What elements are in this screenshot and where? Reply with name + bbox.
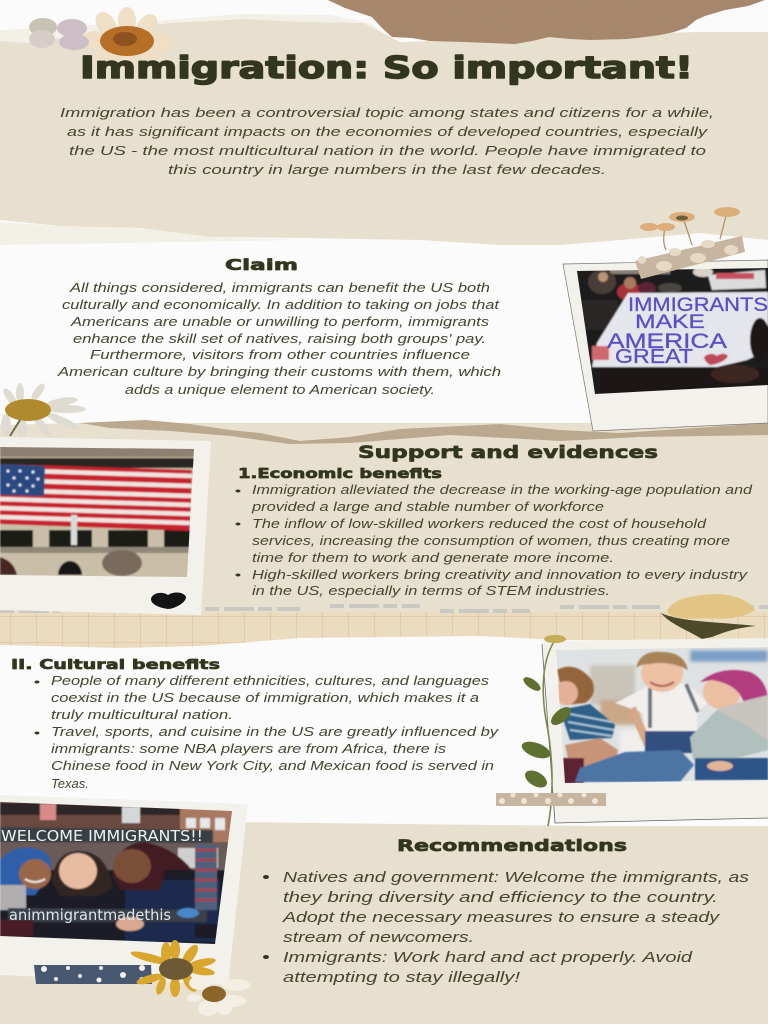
claim text: culturally and economically. In addition to taking on jobs that: [62, 297, 501, 312]
economic benefits heading: 1.Economic benefits: [238, 466, 442, 482]
cultural benefits bullets: Travel, sports, and cuisine in the US are greatly influenced by: [51, 724, 500, 739]
claim text: American culture by bringing their customs with them, which: [57, 364, 501, 379]
protest photo: [577, 268, 768, 394]
cultural benefits bullets: immigrants: some NBA players are from Africa, there is: [51, 741, 447, 756]
economic benefits bullets: High-skilled workers bring creativity and innovation to every industry: [252, 567, 749, 582]
recommendations bullets: attempting to stay illegally!: [283, 969, 521, 986]
cultural benefits bullets: Texas.: [51, 776, 89, 791]
recommendations bullets: [263, 869, 750, 986]
polaroid: protest sign photo: [563, 260, 768, 431]
claim text: Furthermore, visitors from other countries influence: [90, 347, 470, 362]
economic benefits bullets: [236, 482, 753, 598]
recommendations heading: Recommendations: [397, 836, 627, 855]
claim text: enhance the skill set of natives, raising both groups' pay.: [73, 331, 486, 346]
icon: dried yellow flower: [661, 594, 756, 639]
claim heading: Claim: [225, 256, 298, 274]
economic benefits bullets: The inflow of low-skilled workers reduced the cost of household: [252, 516, 707, 531]
icon: green stem with leaves: [520, 635, 574, 826]
economic benefits bullets: Immigration alleviated the decrease in the working-age population and: [252, 482, 753, 497]
polaroid: children photo: [542, 638, 768, 823]
torn brown paper: [328, 0, 765, 44]
economic benefits bullets: in the US, especially in terms of STEM industries.: [252, 583, 610, 598]
flag photo: [0, 445, 200, 580]
panel: support and evidences: [236, 443, 753, 598]
intro text: the US - the most multicultural nation in the world. People have immigrated to: [69, 143, 706, 158]
washi tape: navy hearts: [34, 965, 152, 984]
recommendations bullets: Natives and government: Welcome the immigrants, as: [283, 869, 750, 886]
photo hashtag text: animmigrantmadethis: [9, 906, 171, 924]
recommendations bullets: Immigrants: Work hard and act properly. Avoid: [283, 949, 693, 966]
economic benefits bullets: services, increasing the consumption of women, thus creating more: [252, 533, 730, 548]
support heading: Support and evidences: [358, 443, 658, 463]
economic benefits bullets: provided a large and stable number of workforce: [251, 499, 604, 514]
recommendations bullets: they bring diversity and efficiency to the country.: [283, 889, 718, 906]
claim text: All things considered, immigrants can benefit the US both: [69, 280, 490, 295]
recommendations bullets: Adopt the necessary measures to ensure a steady: [282, 909, 721, 926]
photo sign text: WELCOME IMMIGRANTS!!: [1, 827, 203, 845]
intro text: [60, 105, 714, 177]
washi tape: hearts, top: [635, 236, 745, 279]
cultural benefits bullets: [34, 673, 500, 791]
welcome photo: [0, 800, 235, 948]
intro text: this country in large numbers in the last few decades.: [168, 162, 606, 177]
sign lettering: AMERICA: [607, 330, 727, 353]
sign lettering: IMMIGRANTS: [628, 295, 768, 316]
polaroid: flag building photo: [0, 437, 211, 615]
intro text: Immigration has been a controversial topic among states and citizens for a while,: [60, 105, 714, 120]
pressed flowers, top left: [29, 7, 174, 73]
claim text: [57, 280, 501, 397]
cultural benefits bullets: coexist in the US because of immigration, which makes it a: [51, 690, 479, 705]
sign lettering: [607, 295, 768, 368]
cultural benefits heading: II. Cultural benefits: [11, 657, 220, 673]
economic benefits bullets: time for them to work and generate more income.: [252, 550, 614, 565]
cultural benefits bullets: Chinese food in New York City, and Mexican food is served in: [51, 758, 494, 773]
intro text: as it has significant impacts on the economies of developed countries, especially: [67, 124, 709, 139]
claim text: Americans are unable or unwilling to perform, immigrants: [70, 314, 490, 329]
panel: recommendations: [263, 836, 750, 986]
icon: small orange flowers: [640, 207, 740, 250]
icon: sunflower: [82, 7, 174, 73]
sign lettering: GREAT: [615, 346, 693, 368]
washi tape: hearts, middle: [496, 792, 606, 806]
icon: small white flower: [187, 976, 250, 1016]
recommendations bullets: stream of newcomers.: [283, 929, 474, 946]
icon: white daisy: [1, 382, 86, 441]
polaroid: welcome immigrants photo: [0, 795, 248, 985]
claim text: adds a unique element to American society.: [125, 382, 435, 397]
sign lettering: MAKE: [635, 312, 705, 333]
icon: yellow flower: [130, 940, 217, 997]
icon: black heart: [151, 593, 186, 609]
title: Immigration: So important!: [80, 51, 693, 86]
icon: purple flower: [29, 18, 89, 50]
panel: claim: [57, 256, 501, 397]
children photo: [550, 645, 768, 785]
cultural benefits bullets: People of many different ethnicities, cultures, and languages: [51, 673, 490, 688]
cultural benefits bullets: truly multicultural nation.: [51, 707, 233, 722]
panel: cultural benefits: [11, 657, 500, 791]
